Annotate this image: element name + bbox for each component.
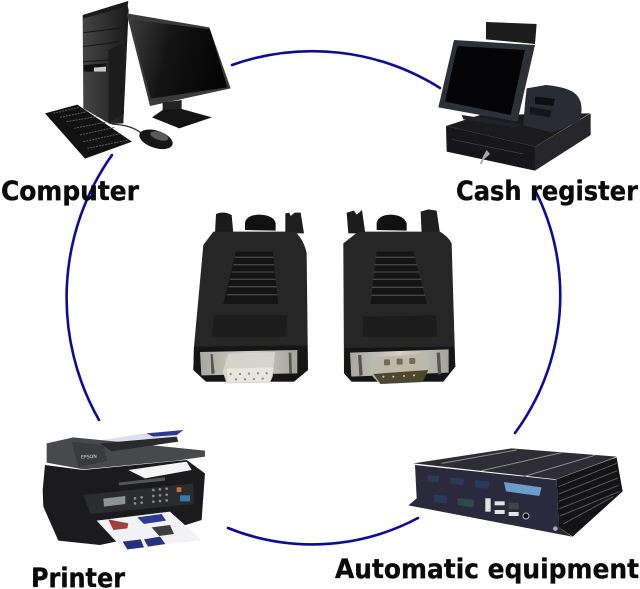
circular connection arcs [67,51,560,544]
connector: female [193,213,308,383]
icon: printer [43,430,205,550]
icon: automatic equipment [408,448,623,537]
figure: pair of DB9 connectors [193,209,455,384]
icon: computer [45,1,231,159]
icon: cash register [438,22,591,171]
label: Computer: Computer [1,176,140,207]
brand label: EPSON [81,454,97,461]
connector: male [343,209,455,384]
